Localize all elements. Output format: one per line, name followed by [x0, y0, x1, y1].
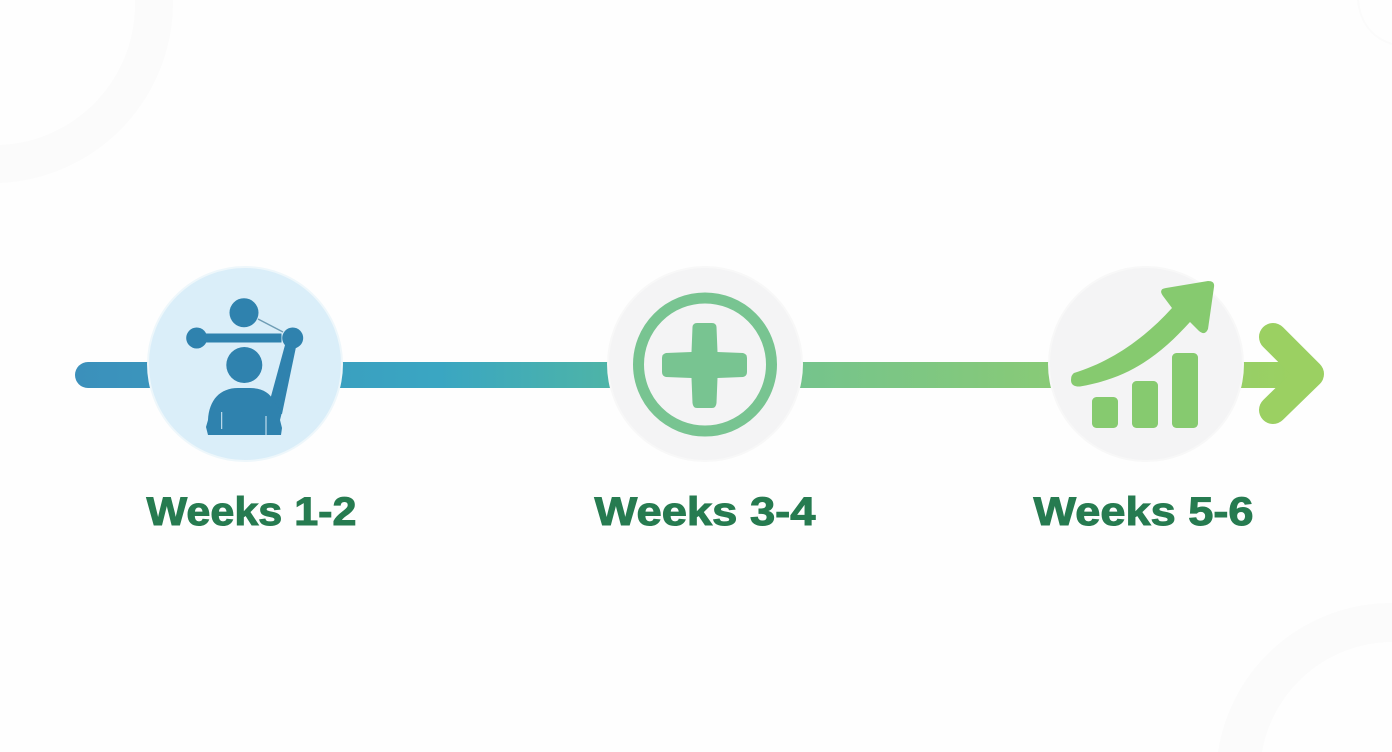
icon: plus in ring — [638, 298, 772, 431]
circle: weeks 1-2 — [148, 267, 342, 461]
icon: person with raised arm and connected nodes — [186, 298, 303, 435]
label: weeks 5-6: Weeks 5-6 — [1034, 490, 1254, 534]
icon: rising bars and growth arrow — [1071, 281, 1214, 428]
circle: weeks 5-6 — [1049, 267, 1243, 461]
circle: weeks 3-4 — [608, 267, 802, 461]
decorative arc: bottom right — [1218, 603, 1392, 752]
decorative arc: top left — [0, 0, 173, 183]
label: weeks 1-2: Weeks 1-2 — [146, 490, 356, 534]
decorative arc: top right — [1358, 0, 1392, 44]
end arrowhead — [1273, 337, 1310, 410]
timeline bar — [75, 362, 1290, 388]
label: weeks 3-4: Weeks 3-4 — [594, 490, 816, 534]
